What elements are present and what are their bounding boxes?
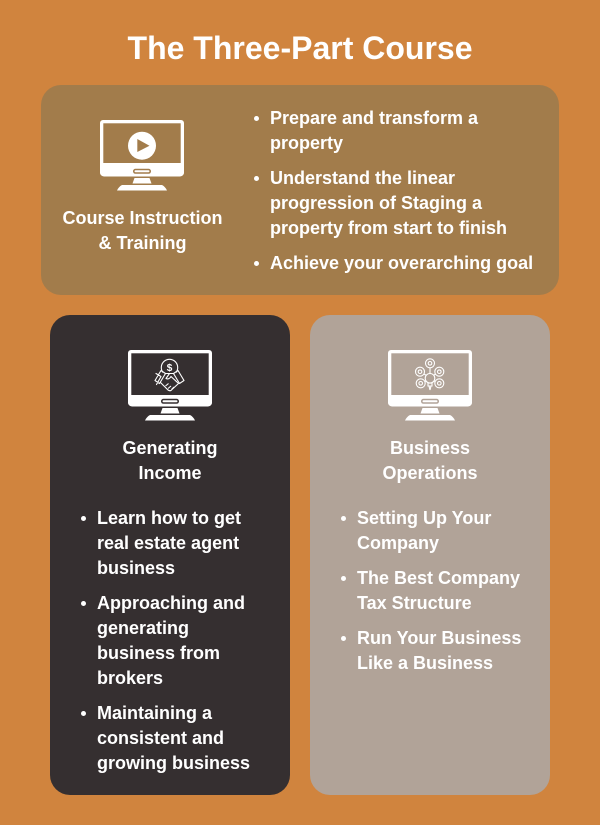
bullet list: business <box>97 558 175 578</box>
bullet list: The Best Company <box>357 568 520 588</box>
bullet list: property <box>270 133 343 153</box>
handshake <box>155 359 184 391</box>
bullet list: property from start to finish <box>270 218 507 238</box>
bullet list: Understand the linear <box>270 168 455 188</box>
panel heading: & Training <box>98 233 186 253</box>
panel heading: Generating <box>122 438 218 458</box>
bullet list: business from <box>97 643 220 663</box>
bullet list: Like a Business <box>357 653 493 673</box>
bullet list: Company <box>357 533 439 553</box>
bullet list: real estate agent <box>97 533 239 553</box>
bullet list <box>81 508 250 773</box>
bullet list: Run Your Business <box>357 628 521 648</box>
network of ideas <box>416 359 444 390</box>
bullet list: growing business <box>97 753 250 773</box>
icon: monitor with idea network <box>388 350 472 420</box>
panel heading: Income <box>138 463 202 483</box>
bullet list: consistent and <box>97 728 224 748</box>
bullet list: Prepare and transform a <box>270 108 478 128</box>
bullet list: Tax Structure <box>357 593 472 613</box>
panel: business operations <box>310 315 550 795</box>
bullet list: Maintaining a <box>97 703 212 723</box>
bullet list: brokers <box>97 668 163 688</box>
panel heading <box>62 208 222 253</box>
panel heading <box>122 438 218 483</box>
icon: monitor with handshake <box>128 350 212 420</box>
panel heading: Operations <box>382 463 478 483</box>
bullet list: progression of Staging a <box>270 193 482 213</box>
panel heading: Course Instruction <box>62 208 222 228</box>
panel heading: Business <box>390 438 470 458</box>
title: The Three-Part Course <box>128 30 472 66</box>
panel: generating income <box>50 315 290 795</box>
bullet list: Approaching and <box>97 593 245 613</box>
icon: monitor with play button <box>100 120 184 190</box>
panel heading <box>382 438 478 483</box>
dollar sign: $ <box>167 363 173 374</box>
bullet list: Achieve your overarching goal <box>270 253 533 273</box>
panel: course instruction and training <box>41 85 559 295</box>
bullet list <box>254 108 533 273</box>
bullet list: Setting Up Your <box>357 508 491 528</box>
bullet list <box>341 508 521 673</box>
bullet list: Learn how to get <box>97 508 241 528</box>
bullet list: generating <box>97 618 189 638</box>
